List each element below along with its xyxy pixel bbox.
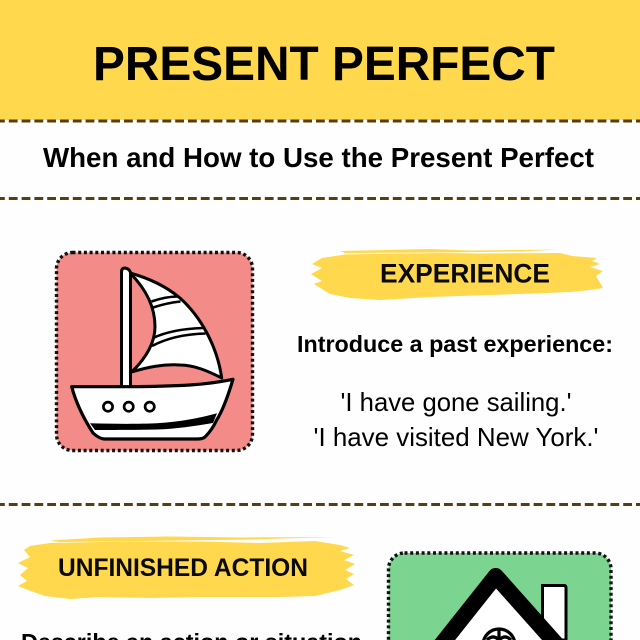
text: experience example 2: 'I have visited New York.' [314, 424, 598, 452]
brush stroke: experience [311, 249, 603, 300]
icon: mast [122, 268, 130, 387]
panel: boat icon [56, 252, 252, 450]
text: experience description: Introduce a past experience: [297, 331, 613, 357]
icon: house wall [437, 576, 562, 640]
panel: house icon [388, 553, 611, 640]
icon: chimney [542, 586, 566, 640]
icon: hull [72, 379, 233, 439]
icon: house roof [437, 576, 562, 640]
icon: round window [483, 629, 515, 640]
brush stroke: unfinished action [18, 536, 355, 599]
text: experience example 1: 'I have gone sailing.' [340, 389, 572, 417]
heading: unfinished action: UNFINISHED ACTION [58, 555, 308, 582]
heading: experience: EXPERIENCE [380, 258, 550, 288]
title: PRESENT PERFECT [93, 38, 555, 91]
header band [0, 0, 640, 120]
subtitle: When and How to Use the Present Perfect [43, 142, 594, 173]
icon: sail [130, 273, 222, 378]
